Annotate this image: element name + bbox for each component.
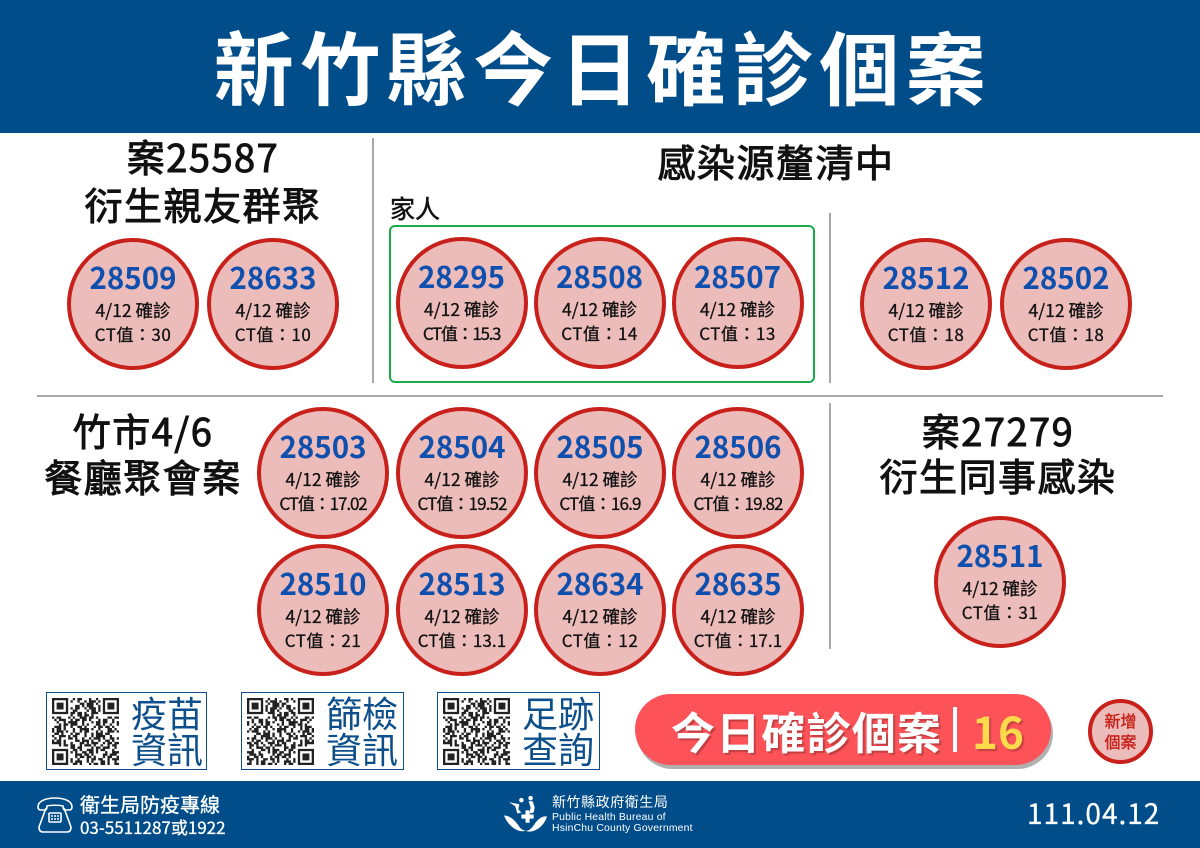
circle: 28506: 4/12 確診: [701, 466, 775, 492]
circle: 28503: 28503: [279, 425, 367, 467]
QR card: screening information: [241, 692, 404, 770]
circle: 28508: 4/12 確診: [562, 296, 637, 322]
heading: source under investigation: 感染源釐清中: [657, 133, 894, 188]
heading: Hsinchu City 4/6 restaurant gathering: 餐廳聚會案: [44, 448, 242, 503]
legend label: 個案: [1104, 729, 1136, 753]
circle: 28635: 4/12 確診: [701, 604, 775, 628]
circle: 28503: 4/12 確診: [286, 466, 360, 492]
circle: 28512: CT值：18: [888, 321, 964, 346]
circle: 28635: 28635: [694, 562, 782, 604]
circle: 28295: 28295: [418, 255, 505, 297]
circle: 28509: 28509: [89, 256, 177, 298]
number: 16: 16: [972, 698, 1024, 762]
label: screening information: 篩檢: [326, 686, 398, 738]
circle: 28505: 28505: [556, 425, 644, 467]
divider: right upper vertical: [829, 213, 831, 383]
bureau name: 新竹縣政府衛生局: [552, 792, 668, 812]
circle: 28506: [672, 407, 804, 539]
hotline text: 衛生局防疫專線: [80, 789, 220, 818]
circle: 28633: CT值：10: [235, 321, 311, 346]
circle: 28513: 28513: [418, 562, 506, 604]
label: screening information: 資訊: [326, 722, 398, 774]
icon: telephone: [37, 797, 73, 833]
circle: 28510: 4/12 確診: [286, 604, 360, 628]
heading: Hsinchu City 4/6 restaurant gathering: [44, 402, 242, 503]
legend label: 新增: [1104, 708, 1136, 732]
circle: 28511: 28511: [956, 534, 1044, 576]
circle: 28505: CT值：16.9: [559, 490, 641, 515]
legend label: [1104, 708, 1136, 753]
circle: 28508: CT值：14: [561, 320, 638, 345]
circle: 28633: [207, 238, 339, 370]
hotline text: 03-5511287或1922: [80, 814, 226, 839]
circle: 28503: CT值：17.02: [279, 490, 367, 515]
circle: 28512: 4/12 確診: [889, 298, 963, 322]
circle: 28511: 4/12 確診: [963, 576, 1037, 600]
circle: 28635: [672, 544, 804, 676]
label: footprint lookup: 查詢: [522, 722, 594, 774]
label: footprint lookup: [522, 686, 594, 774]
icon: health bureau logo: [504, 796, 547, 832]
heading: case 25587: [84, 128, 322, 231]
circle: 28513: [396, 544, 528, 676]
divider: main horizontal: [37, 395, 1163, 397]
QR card: vaccine information: [46, 692, 207, 770]
circle: 28510: CT值：21: [285, 627, 361, 652]
circle: 28507: 28507: [694, 255, 781, 297]
circle: 28634: CT值：12: [562, 627, 638, 652]
title banner: [0, 0, 1200, 133]
bureau English name: HsinChu County Government: [552, 823, 693, 834]
circle: 28511: [934, 516, 1066, 648]
circle: 28508: [534, 237, 666, 369]
heading: case 27279: 衍生同事感染: [879, 447, 1116, 502]
circle: 28635: CT值：17.1: [694, 627, 782, 652]
legend: new case badge: [1088, 699, 1153, 764]
circle: 28513: CT值：13.1: [418, 627, 506, 652]
circle: 28504: [396, 407, 528, 539]
circle: 28506: CT值：19.82: [693, 490, 783, 515]
circle: 28502: 4/12 確診: [1029, 298, 1103, 322]
panel: case 25587: [67, 128, 339, 370]
circle: 28295: CT值：15.3: [423, 320, 500, 345]
circle: 28502: [1000, 238, 1132, 370]
icon: QR code: [443, 698, 510, 765]
icon: QR code: [52, 698, 119, 765]
divider: left vertical: [372, 138, 374, 383]
circle: 28509: [67, 238, 199, 370]
label: vaccine information: 疫苗: [131, 686, 203, 738]
circle: 28502: CT值：18: [1028, 321, 1104, 346]
circle: 28634: 28634: [556, 562, 644, 604]
icon: QR code: [247, 698, 314, 765]
circle: 28505: [534, 407, 666, 539]
title: 新竹縣今日確診個案: [214, 7, 992, 123]
circle: 28634: 4/12 確診: [563, 604, 637, 628]
circle: 28503: [257, 407, 389, 539]
circle: 28508: 28508: [556, 255, 643, 297]
circle: 28633: 4/12 確診: [236, 298, 310, 322]
divider: right lower vertical: [829, 403, 831, 649]
circle: 28504: CT值：19.52: [417, 490, 507, 515]
panel: family cluster: [389, 225, 815, 383]
callout: today's confirmed count: [635, 694, 1051, 765]
hotline text: [80, 789, 226, 839]
circle: 28512: 28512: [882, 256, 970, 298]
label: screening information: [326, 686, 398, 774]
heading: case 27279: [879, 402, 1116, 502]
circle: 28509: CT值：30: [95, 321, 171, 346]
heading: case 25587: 案25587: [127, 128, 279, 183]
circle: 28511: CT值：31: [962, 599, 1038, 624]
circle: 28510: 28510: [279, 562, 367, 604]
bureau English name: Public Health Bureau of: [552, 812, 666, 823]
bureau English name: [552, 812, 693, 834]
circle: 28507: 4/12 確診: [700, 296, 775, 322]
label: family: 家人: [390, 190, 440, 226]
label: vaccine information: [131, 686, 203, 774]
circle: 28510: [257, 544, 389, 676]
footer bar: [0, 781, 1200, 848]
circle: 28502: 28502: [1022, 256, 1110, 298]
divider bar: [953, 707, 957, 752]
label: vaccine information: 資訊: [131, 722, 203, 774]
circle: 28505: 4/12 確診: [563, 466, 637, 492]
circle: 28634: [534, 544, 666, 676]
circle: 28504: 4/12 確診: [425, 466, 499, 492]
circle: 28512: [860, 238, 992, 370]
QR card: footprint lookup: [437, 692, 600, 770]
heading: case 27279: 案27279: [922, 402, 1074, 457]
heading: case 25587: 衍生親友群聚: [84, 176, 322, 231]
circle: 28509: 4/12 確診: [96, 298, 170, 322]
circle: 28507: [672, 237, 804, 369]
circle: 28504: 28504: [418, 425, 506, 467]
circle: 28507: CT值：13: [699, 320, 776, 345]
circle: 28506: 28506: [694, 425, 782, 467]
date: 111.04.12: [1027, 793, 1160, 833]
circle: 28295: 4/12 確診: [424, 296, 499, 322]
circle: 28513: 4/12 確診: [425, 604, 499, 628]
heading: Hsinchu City 4/6 restaurant gathering: 竹市4/6: [73, 402, 213, 457]
circle: 28295: [396, 237, 528, 369]
circle: 28633: 28633: [229, 256, 317, 298]
label: footprint lookup: 足跡: [522, 686, 594, 738]
label: today's confirmed cases: 今日確診個案: [671, 698, 942, 762]
